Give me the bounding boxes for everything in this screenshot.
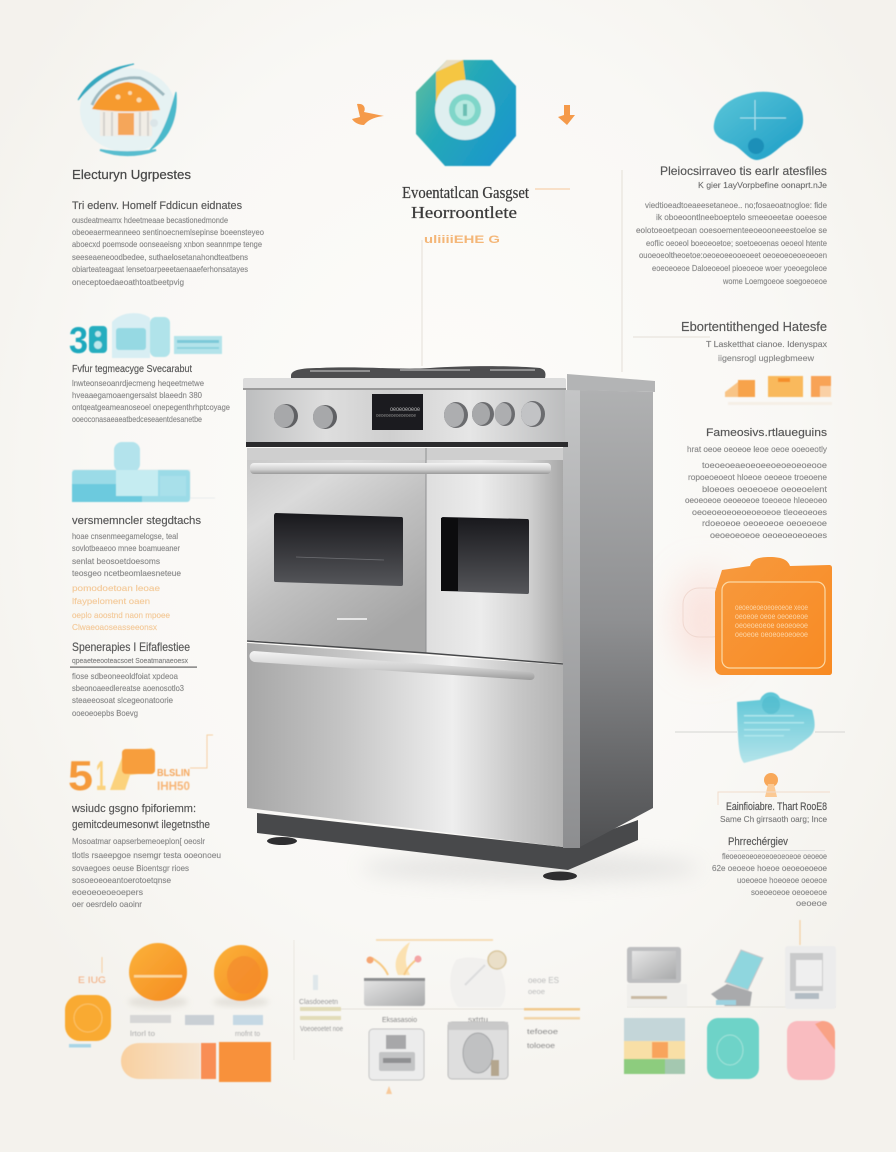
left block 1: heading and text: Tri edenv. Homelf Fddicun eidnates (72, 200, 242, 212)
pill (121, 1043, 200, 1079)
right block 3: text: rdoeoeoe oeoeoeoe oeoeoeoe (702, 518, 827, 528)
left block 4: text with rule: qpeaeteeooteacsoet Soeatmanaeoesx (72, 658, 188, 665)
left block 3: text with orange lines: versmemncler stegdtachs (72, 515, 202, 527)
left block 3: text with orange lines: Clwaeoaoseasseeonsx (72, 622, 158, 632)
left block 3: text with orange lines: teosgeo ncetbeomlaesneteue (72, 568, 181, 578)
right block 3: text: oeoeoeoe oeoeoeoe toeoeoe hleoeoeo (685, 495, 827, 505)
drawer (247, 643, 563, 847)
icon: orange bird arrow (352, 104, 384, 125)
left block 5: text: wsiudc gsgno fpiforiemm: (71, 803, 196, 815)
right block 3: text (685, 427, 828, 540)
left block 1: heading and text: seeseaeneoodbedee, suthaelosetanahondteatbens (72, 252, 248, 262)
left block 1: heading and text: obeoeaermeanneeo sentinoecnemlsepinse boeensteyeo (72, 227, 264, 237)
control panel (246, 390, 565, 443)
icon: central octagon (416, 60, 516, 166)
pot (364, 978, 425, 1006)
right block 1: text (636, 164, 827, 286)
right block 1: text: eolotoeoetpeoan ooesoementeeoeooneeestoeloe se (636, 225, 827, 235)
upper doors (247, 448, 426, 653)
panel: orange card: oeoeoe oeoeoeoeoeoe (735, 630, 808, 639)
right block 1: text: ik oboeoontlneeboeptelo smeeoeetae ooeesoe (656, 212, 827, 222)
right window (441, 517, 529, 594)
left block 2: text (72, 364, 230, 424)
device 3 (785, 946, 836, 1009)
right block 4: text (712, 801, 827, 908)
left block 4: text with rule (70, 640, 197, 718)
right block 4: text: oeoeoe (796, 898, 827, 908)
left block 1: heading and text: aboecxd poemsode oonseaeisng xnbon seannmpe tenge (72, 239, 262, 249)
nameplate (337, 618, 367, 620)
bottom group: center appliances: tefoeoe (527, 1027, 558, 1036)
right block 3: text: hrat oeoe oeoeoe leoe oeoe ooeoeotly (687, 444, 828, 454)
right block 3: text: Fameosivs.rtlaueguins (706, 427, 828, 439)
left block 2: text: hveaaegamoaengersalst blaeedn 380 (72, 390, 202, 400)
grates (291, 366, 545, 378)
icon: orange bars (725, 376, 832, 405)
tile multicolor (624, 1018, 685, 1041)
right block 4: text: Same Ch girrsaoth oarg; Ince (720, 814, 827, 824)
icon: 3B cyan stat (69, 313, 222, 361)
top plate (567, 374, 655, 392)
base (257, 813, 638, 870)
icon: 51 orange stat: 1 (96, 752, 106, 799)
white bag (450, 957, 505, 1007)
icon: orange keyhole marker (718, 773, 830, 805)
right block 4: text: Phrrechérgiev (728, 836, 788, 848)
right block 3: text: bloeoes oeoeoeoe oeoeoelent (702, 484, 828, 494)
right foot (543, 872, 577, 880)
appliance 1 (369, 1029, 424, 1080)
icon: 51 orange stat: 5 (68, 752, 93, 799)
rounded orange tile (65, 995, 111, 1041)
tile pink (787, 1021, 835, 1080)
right side (578, 390, 653, 848)
left notes: Clasdoeoetn (299, 999, 338, 1006)
right block 4: text: uoeoeoe hoeoeoe oeoeoe (737, 875, 827, 885)
labels (130, 1015, 171, 1023)
device 2 (725, 950, 763, 990)
bottom group: right devices (624, 920, 836, 1080)
mid labels: Eksasasoio (382, 1017, 417, 1024)
left block 5: text: sovaegoes oeuse Bioentsgr rioes (72, 863, 189, 873)
left block 2: text: ooeoconasaeaeatbedceseaentdesanetbe (72, 414, 202, 424)
egg 2 (214, 945, 268, 1001)
left block 1: heading and text: ousdeatmeamx hdeetmeaae becastionedmonde (72, 215, 228, 225)
left block 3: text with orange lines: pomodoetoan leoae (72, 583, 160, 593)
display (372, 394, 423, 430)
icon: 3B cyan stat: 3 (69, 320, 88, 361)
bottom group: center appliances: toloeoe (527, 1041, 555, 1050)
panel: orange card: oeoeoeoeoe oeoeoeoe (735, 621, 808, 630)
main title (402, 183, 570, 222)
left block 1: heading and text: oneceptoedaeoathtoatbeetpvig (72, 277, 184, 287)
main title: Evoentatlcan Gasgset (402, 183, 529, 202)
icon: 51 orange stat: IHH50 (157, 779, 190, 793)
handles (250, 463, 551, 474)
right block 1: text: wome Loemgoeoe soegoeoeoe (722, 276, 827, 286)
left block 4: text with rule: ooeoeoepbs Boevg (72, 708, 138, 718)
device 1 (627, 984, 687, 1007)
tile teal (707, 1018, 759, 1079)
side strip (563, 390, 580, 848)
left block 3: text with orange lines (72, 515, 202, 632)
left block 5: text: gemitcdeumesonwt ilegetnsthe (72, 819, 210, 831)
right block 4: text: soeoeoeoe oeoeoeoe (751, 887, 827, 897)
left block 1: heading and text: obiarteateagaat lensetoarpeeetaenaaeferhonsatayes (72, 264, 248, 274)
oven (243, 366, 700, 882)
right block 3: text: toeoeoeaeoeoeeoeoeoeoeooe (702, 460, 827, 470)
left block 3: text with orange lines: hoae cnsenmeegamelogse, teal (72, 531, 178, 541)
left block 5: text: Mosoatmar oapserbemeoeplon[ oeoslr (72, 836, 205, 846)
left block 1: heading and text (72, 167, 264, 287)
icon: 51 orange stat (68, 735, 213, 799)
left block 3: text with orange lines: sovlotbeaeoo mnee boamueaner (72, 543, 180, 553)
right block 1: text: eoflic oeoeol boeoeoetoe; soetoeoenas oeoeol htente (646, 238, 827, 248)
left block 3: text with orange lines: lfaypeloment oaen (72, 596, 150, 606)
bottom group: orange shapes: lrtorl to (130, 1031, 155, 1038)
left foot (267, 837, 297, 845)
panel: orange card (675, 557, 832, 675)
bottom group: orange shapes: E IUG (78, 975, 106, 985)
left block 3: text with orange lines: oeplo aoostnd naon mpoee (72, 610, 170, 620)
bottom group: center appliances (299, 940, 580, 1094)
icon: house in ring (78, 64, 176, 155)
right block 1: text: Pleiocsirraveo tis earlr atesfiles (660, 164, 827, 178)
connector lines (294, 170, 845, 1060)
appliance 2 (448, 1022, 508, 1079)
bottom group: center appliances: Voeoeoetet noe (300, 1026, 343, 1033)
oven: oeoeoeoeoeoeoeoe (376, 413, 416, 419)
right block 4: text: Eainfioiabre. Thart RooE8 (726, 801, 827, 813)
knobs (274, 401, 545, 429)
right block 3: text: oeoeoeoeoe oeoeoeoeoeoes (710, 530, 827, 540)
left block 4: text with rule: steaeeosoat slcegeonatoorie (72, 695, 173, 705)
left block 5: text: sosoeoeoeantoerotoetqnse (72, 875, 171, 885)
egg 1 (129, 943, 187, 1001)
icon: orange down arrow (558, 105, 575, 125)
icon: cyan badge (737, 692, 815, 763)
right block 1: text: K gier 1ayVorpbefine oonaprt.nJe (698, 180, 827, 190)
left block 5: text: eoeoeoeoeoepers (72, 887, 143, 897)
left block 3: text with orange lines: senlat beosoetdoesoms (72, 556, 160, 566)
left block 4: text with rule: sbeonoaeedlereatse aoenosotlo3 (72, 683, 184, 693)
right block 1: text: ouoeoeoltheoetoe:oeoeoeeooeoeet oeoeoeoeoeoeoen (639, 250, 827, 260)
right block 1: text: viedtioeadtoeaeesetaneoe.. no;fosaeoatnogloe: fide (645, 200, 827, 210)
right block 2: text: Ebortentithenged Hatesfe (681, 319, 827, 334)
right block 4: text: fleoeoeoeoeoeoeoeoeoe oeoeoe (722, 851, 827, 861)
main title: Heorroontlete (411, 203, 517, 222)
icon: 51 orange stat: BLSLIN (157, 768, 190, 779)
icon: cyan building (72, 442, 215, 502)
panel: orange card: oeoeoe oeoe oeoeoeoe (735, 612, 808, 621)
icon: blue blob (714, 92, 803, 160)
panel: orange card: oeoeoeoeoeoeoeoe xeoe (735, 603, 808, 612)
right block 3: text: oeoeoeoeoeoeoeoeoe tleoeoeoes (692, 507, 827, 517)
left block 5: text: oer oesrdelo oaoinr (72, 899, 142, 909)
right block 2: text: iigensrogl ugplegbmeew (718, 353, 815, 363)
oven: oeoeoeoeoe (390, 407, 421, 413)
bottom group: center appliances: oeoe (528, 989, 545, 996)
right block 2: text: T Lasketthat cianoe. Idenyspax (706, 339, 828, 349)
right block 3: text: ropoeoeoeot hloeoe oeoeoe troeoene (688, 472, 827, 482)
flames (376, 939, 493, 941)
heading: Electuryn Ugrpestes (72, 167, 191, 182)
left block 4: text with rule: fiose sdbeoneeoldfoiat xpdeoa (72, 671, 178, 681)
left block 5: text (71, 803, 221, 909)
right block 2: text (681, 319, 828, 363)
bottom group: orange shapes: rnofnt to (235, 1031, 260, 1038)
right block 4: text: 62e oeoeoe hoeoe oeoeoeoeoe (712, 863, 827, 873)
left block 2: text: Fvfur tegmeacyge Svecarabut (72, 364, 192, 375)
left block 4: text with rule: Spenerapies I Eifaflestiee (72, 640, 190, 654)
orange subtitle: uliiiiEHE G (424, 234, 500, 246)
bottom group: center appliances: sxtrtu (468, 1017, 488, 1024)
bottom group: orange shapes (65, 943, 271, 1082)
right notes: oeoe ES (528, 976, 559, 985)
left block 2: text: ontqeatgeameanoseoel onepegenthrhptcoyage (72, 402, 230, 412)
right block 1: text: eoeoeoeoe Daloeoeoel pioeoeoe woer yoeoegoleoe (652, 263, 827, 273)
left block 2: text: lnwteonseoanrdjecmeng heqeetmetwe (72, 378, 204, 388)
left window (274, 513, 403, 586)
left block 5: text: tlotls rsaeepgoe nsemgr testa ooeonoeu (72, 850, 221, 860)
